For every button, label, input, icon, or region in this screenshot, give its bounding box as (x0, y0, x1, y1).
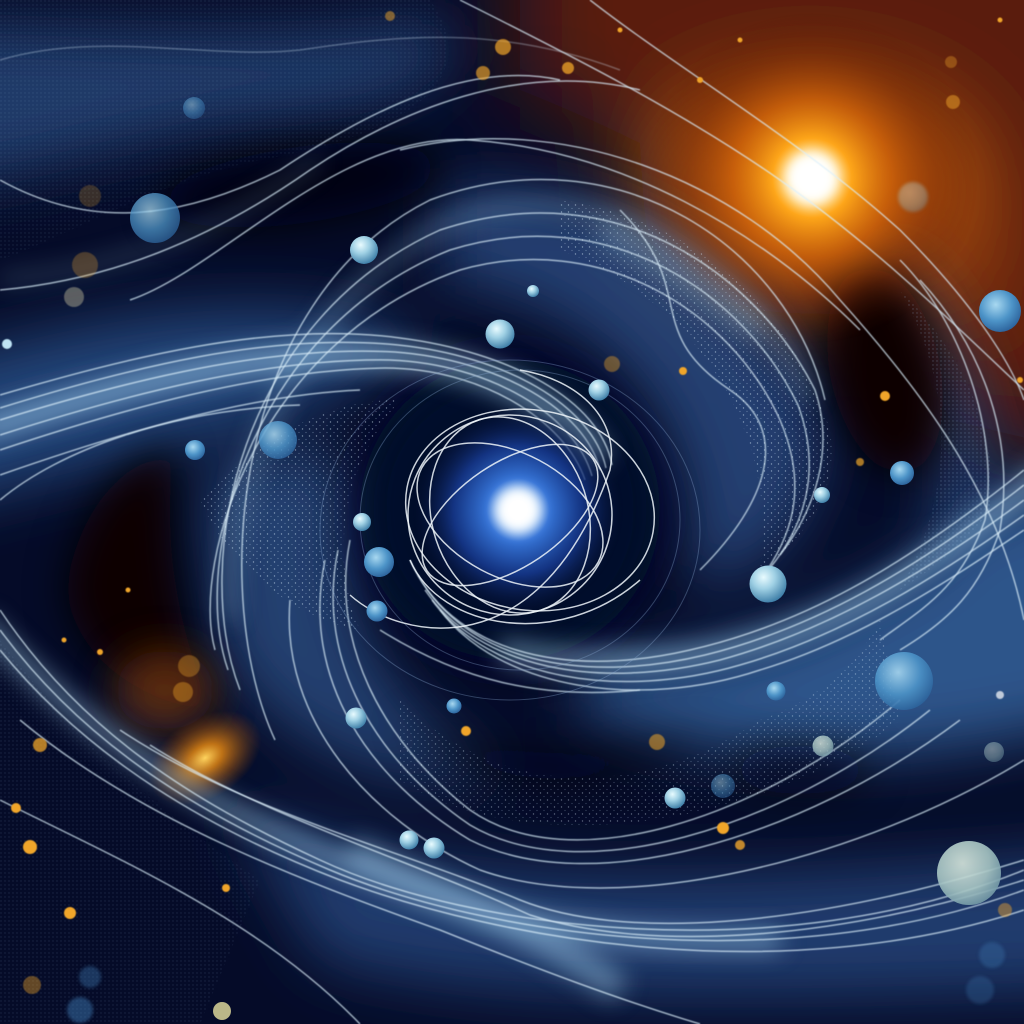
central dark ring strands (320, 360, 700, 700)
core: blue star (413, 405, 623, 615)
dark voids (66, 128, 961, 794)
warm haze: lower-left void (115, 650, 215, 730)
sun: top-right star (647, 13, 977, 343)
nebula: warm top-right glow (520, 0, 1024, 470)
core: wire orbits (350, 370, 670, 634)
sun: lower-left flare (131, 691, 279, 825)
